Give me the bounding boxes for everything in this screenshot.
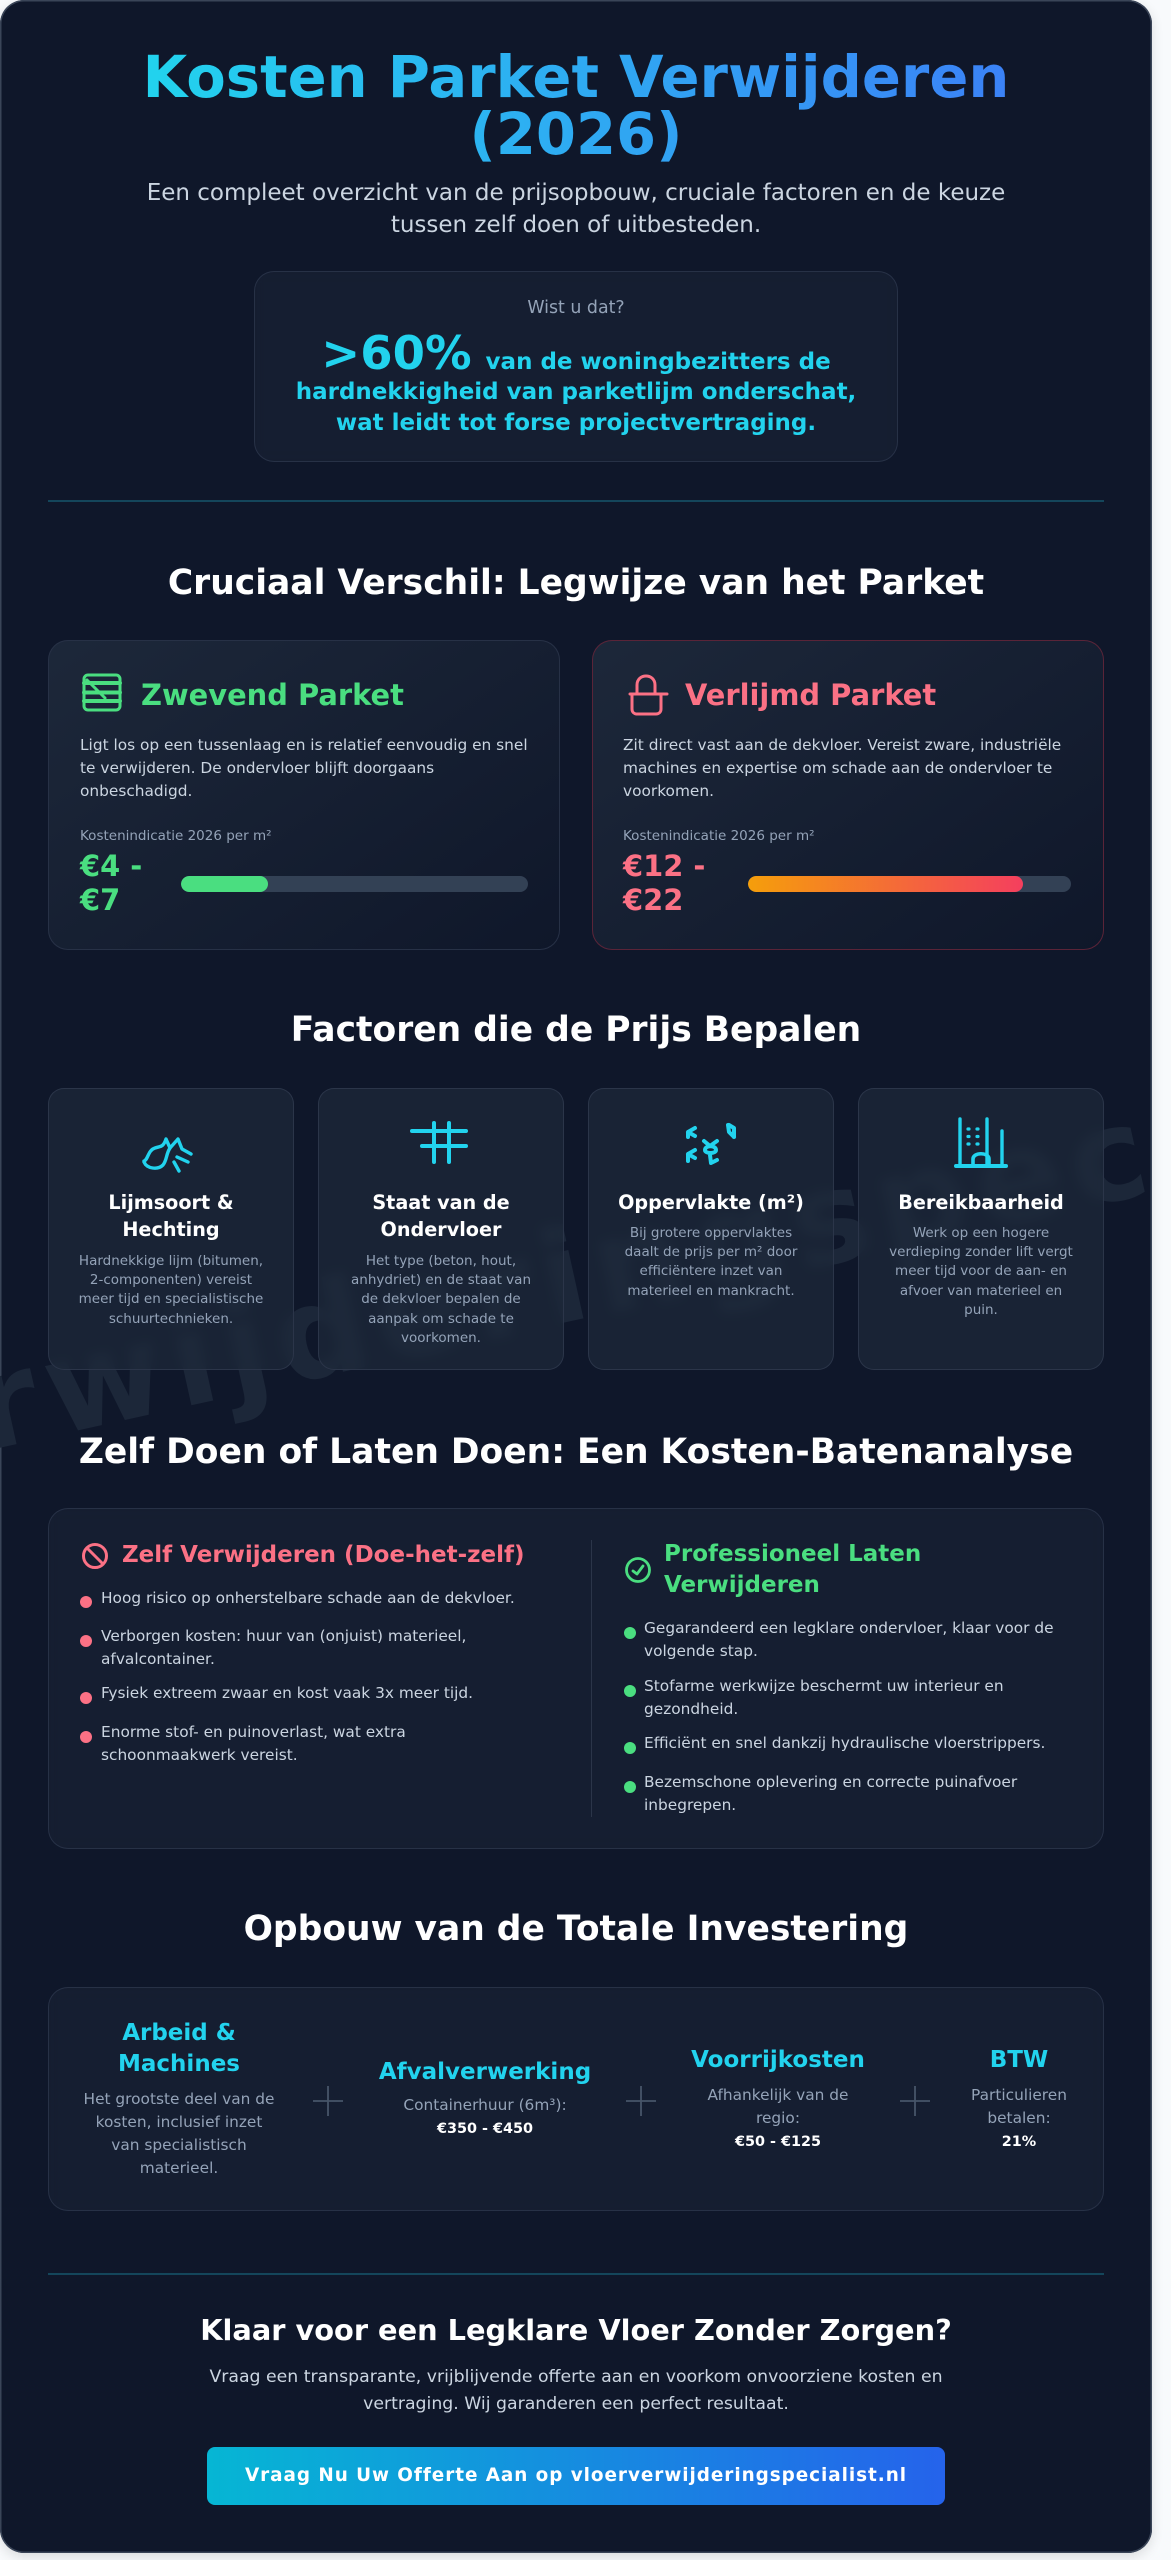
card text: afvoer van materieel en — [900, 1283, 1062, 1299]
panel description: Zit direct vast aan de dekvloer. Vereist zware, industriële — [623, 736, 1061, 754]
panel description: Ligt los op een tussenlaag en is relatief eenvoudig en snel — [80, 736, 528, 754]
cost bar — [181, 876, 528, 892]
card text — [889, 1225, 1073, 1318]
price range — [80, 849, 142, 917]
item title: Arbeid & — [122, 2020, 236, 2046]
plus — [900, 2086, 930, 2116]
panel description: voorkomen. — [623, 782, 714, 800]
item text — [971, 2086, 1067, 2150]
card text: efficiëntere inzet van — [640, 1263, 782, 1279]
left column heading: Zelf Verwijderen (Doe-het-zelf) — [122, 1542, 525, 1568]
card text: aanpak om schade te — [368, 1311, 514, 1327]
item — [101, 1723, 406, 1764]
panel: verlijmd parket — [592, 640, 1104, 950]
subtitle — [147, 180, 1005, 238]
item: volgende stap. — [644, 1642, 758, 1660]
panel: oppervlakte — [588, 1088, 834, 1370]
card text: voorkomen. — [401, 1330, 481, 1346]
cta text: Vraag een transparante, vrijblijvende offerte aan en voorkom onvoorziene kosten en — [209, 2367, 943, 2387]
card text — [351, 1253, 531, 1346]
right column heading: Verwijderen — [664, 1572, 820, 1598]
item: Bezemschone oplevering en correcte puinafvoer — [644, 1773, 1017, 1791]
item text: van specialistisch — [111, 2136, 247, 2154]
card text: 2-componenten) vereist — [90, 1272, 252, 1288]
right column heading: Professioneel Laten — [664, 1541, 921, 1567]
item: afval — [379, 2059, 591, 2137]
panel title: Verlijmd Parket — [685, 678, 936, 712]
item: arbeid — [84, 2020, 274, 2177]
item text: €350 - €450 — [437, 2121, 533, 2137]
right column list — [624, 1619, 1054, 1814]
item title — [118, 2020, 240, 2077]
divider — [48, 500, 1104, 502]
item: btw — [971, 2047, 1067, 2150]
subtitle: tussen zelf doen of uitbesteden. — [391, 212, 761, 238]
cta text — [48, 2364, 1104, 2418]
callout statistic: >60% van de woningbezitters de — [321, 326, 831, 380]
card text — [79, 1253, 263, 1327]
heading: factoren: Factoren die de Prijs Bepalen — [291, 1010, 861, 1050]
panel: zwevend parket — [48, 640, 560, 950]
item text: kosten, inclusief inzet — [96, 2113, 262, 2131]
cta text: vertraging. Wij garanderen een perfect resultaat. — [363, 2394, 789, 2414]
callout statistic: wat leidt tot forse projectvertraging. — [336, 410, 816, 436]
panel: lijmsoort — [48, 1088, 294, 1370]
price range: €12 - — [623, 849, 705, 883]
subtitle: Een compleet overzicht van de prijsopbouw, cruciale factoren en de keuze — [147, 180, 1005, 206]
right column heading — [664, 1541, 921, 1598]
item text — [708, 2086, 848, 2150]
item title: BTW — [990, 2047, 1048, 2073]
item: Efficiënt en snel dankzij hydraulische vloerstrippers. — [644, 1734, 1045, 1752]
card title — [108, 1191, 234, 1241]
price range — [622, 849, 705, 917]
item text — [403, 2096, 567, 2137]
panel title: Zwevend Parket — [141, 678, 404, 712]
panel description: te verwijderen. De ondervloer blijft doorgaans — [80, 759, 434, 777]
heading: zelf doen: Zelf Doen of Laten Doen: Een Kosten-Batenanalyse — [79, 1432, 1073, 1472]
card text: verdieping zonder lift vergt — [889, 1244, 1073, 1260]
cta button — [207, 2447, 945, 2505]
callout statistic — [296, 326, 856, 436]
panel: ondervloer — [318, 1088, 564, 1370]
icon: forbidden — [82, 1543, 108, 1569]
cta button: Vraag Nu Uw Offerte Aan op vloerverwijderingspecialist.nl — [245, 2465, 907, 2486]
price range: €4 - — [80, 849, 142, 883]
panel: kosten-baten — [48, 1508, 1104, 1849]
card text: Het type (beton, hout, — [366, 1253, 516, 1269]
title — [136, 49, 1016, 163]
panel description: onbeschadigd. — [80, 782, 192, 800]
bullet — [624, 1781, 636, 1793]
item text: Containerhuur (6m³): — [403, 2096, 567, 2114]
icon: glue — [142, 1137, 193, 1173]
icon: lock — [628, 674, 668, 716]
card text: materieel en mankracht. — [627, 1283, 795, 1299]
card text: meer tijd voor de aan- en — [895, 1263, 1067, 1279]
panel: investering — [48, 1987, 1104, 2211]
left column list — [80, 1588, 515, 1764]
item text: materieel. — [140, 2159, 218, 2177]
card text: puin. — [964, 1302, 998, 1318]
icon: area — [686, 1122, 736, 1165]
item: Fysiek extreem zwaar en kost vaak 3x meer tijd. — [101, 1684, 473, 1702]
item: Hoog risico op onherstelbare schade aan de dekvloer. — [101, 1588, 515, 1606]
item text — [84, 2090, 274, 2177]
callout label: Wist u dat? — [527, 298, 625, 318]
card text — [625, 1225, 798, 1299]
column separator — [591, 1540, 592, 1817]
item: inbegrepen. — [644, 1796, 736, 1814]
card text: de dekvloer bepalen de — [361, 1291, 521, 1307]
card title: Bereikbaarheid — [898, 1191, 1064, 1214]
price range: €22 — [623, 883, 683, 917]
divider — [48, 2273, 1104, 2275]
bullet — [624, 1742, 636, 1754]
item text: €50 - €125 — [735, 2134, 821, 2150]
item: voorrij — [691, 2047, 865, 2150]
item — [644, 1773, 1018, 1814]
cost label: Kostenindicatie 2026 per m² — [80, 828, 272, 844]
panel description — [80, 736, 528, 800]
heading: opbouw: Opbouw van de Totale Investering — [244, 1909, 908, 1949]
item title: Voorrijkosten — [691, 2047, 865, 2073]
item: Enorme stof- en puinoverlast, wat extra — [101, 1723, 406, 1741]
card text: Bij grotere oppervlaktes — [630, 1225, 792, 1241]
item text: 21% — [1002, 2134, 1036, 2150]
item: Verborgen kosten: huur van (onjuist) materieel, — [101, 1627, 466, 1645]
item: Gegarandeerd een legklare ondervloer, klaar voor de — [644, 1619, 1054, 1637]
icon: check — [625, 1557, 651, 1583]
item: gezondheid. — [644, 1700, 738, 1718]
panel: bereikbaarheid — [858, 1088, 1104, 1370]
plus — [313, 2086, 343, 2116]
heading: cta: Klaar voor een Legklare Vloer Zonder Zorgen? — [200, 2313, 952, 2347]
item text: Particulieren — [971, 2086, 1067, 2104]
bar fill — [748, 876, 1023, 892]
card title: Lijmsoort & — [108, 1191, 234, 1214]
heading: legwijze: Cruciaal Verschil: Legwijze van het Parket — [168, 563, 984, 603]
item text: Het grootste deel van de — [84, 2090, 274, 2108]
item — [644, 1619, 1054, 1660]
card title — [372, 1191, 510, 1241]
bullet — [624, 1685, 636, 1697]
card title: Ondervloer — [381, 1218, 501, 1241]
card title: Hechting — [122, 1218, 220, 1241]
cost label: Kostenindicatie 2026 per m² — [623, 828, 815, 844]
bullet — [80, 1731, 92, 1743]
plus — [626, 2086, 656, 2116]
bullet — [624, 1627, 636, 1639]
title: (2026) — [470, 101, 682, 168]
item text: Afhankelijk van de — [708, 2086, 848, 2104]
card text: Werk op een hogere — [913, 1225, 1049, 1241]
icon: grid — [410, 1121, 468, 1164]
item — [644, 1677, 1004, 1718]
icon: building — [954, 1117, 1008, 1168]
item: schoonmaakwerk vereist. — [101, 1746, 298, 1764]
panel description: machines en expertise om schade aan de ondervloer te — [623, 759, 1052, 777]
item: Stofarme werkwijze beschermt uw interieur en — [644, 1677, 1004, 1695]
item title: Machines — [118, 2051, 240, 2077]
card title: Oppervlakte (m²) — [618, 1191, 804, 1214]
item title: Afvalverwerking — [379, 2059, 591, 2085]
bullet — [80, 1692, 92, 1704]
icon: planks — [82, 674, 122, 712]
bar fill — [181, 876, 268, 892]
cost bar — [748, 876, 1071, 892]
card text: Hardnekkige lijm (bitumen, — [79, 1253, 263, 1269]
card text: daalt de prijs per m² door — [625, 1244, 797, 1260]
callout: wist u dat — [254, 271, 898, 462]
card text: anhydriet) en de staat van — [351, 1272, 531, 1288]
item: afvalcontainer. — [101, 1650, 215, 1668]
card text: schuurtechnieken. — [109, 1311, 233, 1327]
panel description — [623, 736, 1061, 800]
callout statistic: hardnekkigheid van parketlijm onderschat, — [296, 379, 856, 405]
card text: meer tijd en specialistische — [79, 1291, 263, 1307]
card title: Staat van de — [372, 1191, 510, 1214]
item text: regio: — [756, 2109, 800, 2127]
bullet — [80, 1596, 92, 1608]
item text: betalen: — [987, 2109, 1051, 2127]
item — [101, 1627, 466, 1668]
bullet — [80, 1635, 92, 1647]
price range: €7 — [80, 883, 120, 917]
title: Kosten Parket Verwijderen — [143, 44, 1009, 111]
